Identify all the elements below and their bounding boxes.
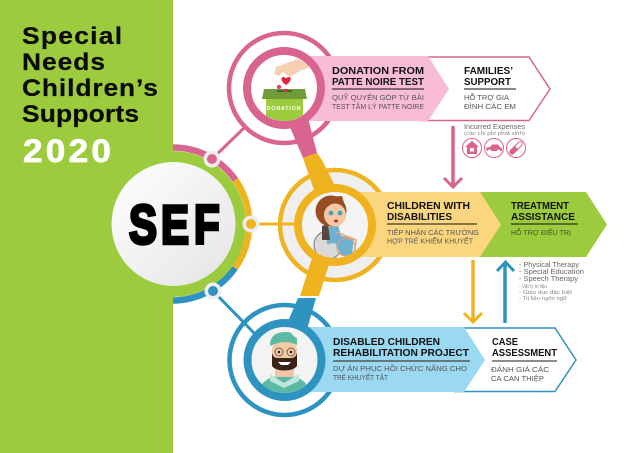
icon: car	[484, 138, 504, 158]
text: children with disabilities: DISABILITIES	[387, 212, 452, 223]
text: families' support: HỖ TRỢ GIA	[464, 93, 510, 102]
yellow inner circle	[298, 188, 372, 262]
pink inner circle	[247, 51, 321, 125]
outlined arrow: case assessment	[455, 328, 576, 392]
text: case assessment	[491, 337, 557, 383]
hub node: blue	[204, 282, 222, 300]
text: case assessment: ASSESSMENT	[492, 348, 557, 359]
blue panel	[305, 327, 485, 392]
icon: house	[462, 138, 482, 158]
text: donation from patte noire test: DONATION FROM	[332, 66, 424, 77]
hub green backing	[173, 151, 246, 297]
text: case assessment: ĐÁNH GIÁ CÁC	[491, 365, 550, 374]
icon: donation box: DONATION	[266, 106, 301, 112]
title	[22, 23, 158, 170]
outer ring: yellow	[280, 170, 390, 280]
text: children with disabilities: HỢP TRẺ KHIẾM KHUYẾT	[387, 236, 473, 246]
title: Needs	[22, 49, 105, 76]
text: disabled children rehabilitation project: DỰ ÁN PHỤC HỒI CHỨC NĂNG CHO	[333, 363, 467, 373]
arrow: blue up	[497, 262, 514, 323]
hub ring arcs	[173, 148, 249, 300]
text: donation from patte noire test: QUỸ QUYÊN GÓP TỪ BÀI	[332, 93, 424, 102]
text: families' support: SUPPORT	[464, 77, 511, 88]
text: disabled children rehabilitation project: DISABLED CHILDREN	[333, 337, 440, 348]
green side panel	[0, 0, 173, 453]
icon: child in wheelchair	[314, 196, 356, 259]
outlined arrow: families' support	[420, 57, 550, 120]
icon: doctor	[262, 332, 306, 393]
text: therapy list: - Speech Therapy	[519, 274, 578, 283]
text: treatment assistance: TREATMENT	[511, 201, 569, 212]
text: families' support: FAMILIES’	[464, 66, 513, 77]
green arrow: treatment assistance	[470, 192, 607, 257]
text: donation from patte noire test	[332, 66, 424, 111]
text: treatment assistance: ASSISTANCE	[511, 212, 575, 223]
text: incurred expenses: (các chi phí phát sinh)	[464, 131, 525, 137]
SEF hub circle: SEF	[129, 195, 220, 256]
text: families' support: ĐÌNH CÁC EM	[464, 102, 516, 111]
pink panel	[300, 56, 449, 121]
text: donation from patte noire test: TEST TÂM LÝ PATTE NOIRE	[332, 102, 424, 111]
title: Supports	[22, 101, 139, 128]
title: 2020	[23, 134, 111, 170]
text: treatment assistance: HỖ TRỢ ĐIỀU TRỊ	[511, 227, 571, 237]
outer ring: pink	[229, 33, 339, 143]
text: treatment assistance	[511, 201, 578, 237]
text: disabled children rehabilitation project: REHABILITATION PROJECT	[333, 348, 469, 359]
text: therapy list: - Special Education	[519, 267, 584, 276]
text: therapy list	[519, 260, 584, 302]
text: case assessment: CA CAN THIỆP	[491, 374, 544, 383]
text: therapy list: - Vật lý trị liệu	[519, 284, 547, 290]
text: children with disabilities: TIẾP NHẬN CÁC TRƯỜNG	[387, 227, 479, 237]
text: children with disabilities	[387, 201, 479, 246]
outer ring: blue	[230, 305, 340, 415]
arrow: yellow down	[464, 260, 482, 322]
text: families' support	[464, 66, 516, 111]
text: therapy list: - Giáo dục đặc biệt	[519, 290, 573, 296]
circle handles	[286, 118, 334, 326]
yellow panel	[355, 192, 501, 257]
title: Special	[22, 23, 122, 50]
text: donation from patte noire test: PATTE NOIRE TEST	[332, 77, 424, 88]
text: incurred expenses: Incurred Expenses	[464, 122, 525, 131]
text: disabled children rehabilitation project	[333, 337, 470, 382]
text: case assessment: CASE	[492, 337, 518, 348]
text: children with disabilities: CHILDREN WITH	[387, 201, 470, 212]
connector lines from hub to circles	[212, 127, 298, 334]
blue inner circle	[248, 323, 322, 397]
text: therapy list: - Trị liệu ngôn ngữ	[519, 296, 568, 302]
hub node: pink	[204, 150, 220, 168]
arrow: pink down	[444, 126, 462, 187]
title: Children’s	[22, 75, 158, 102]
SEF hub circle	[112, 162, 236, 286]
icon: capsule	[506, 138, 526, 158]
hub node: yellow	[242, 216, 260, 232]
text: therapy list: - Physical Therapy	[519, 260, 579, 269]
text: disabled children rehabilitation project: TRẺ KHUYẾT TẬT	[333, 372, 388, 382]
text: incurred expenses	[464, 122, 525, 137]
